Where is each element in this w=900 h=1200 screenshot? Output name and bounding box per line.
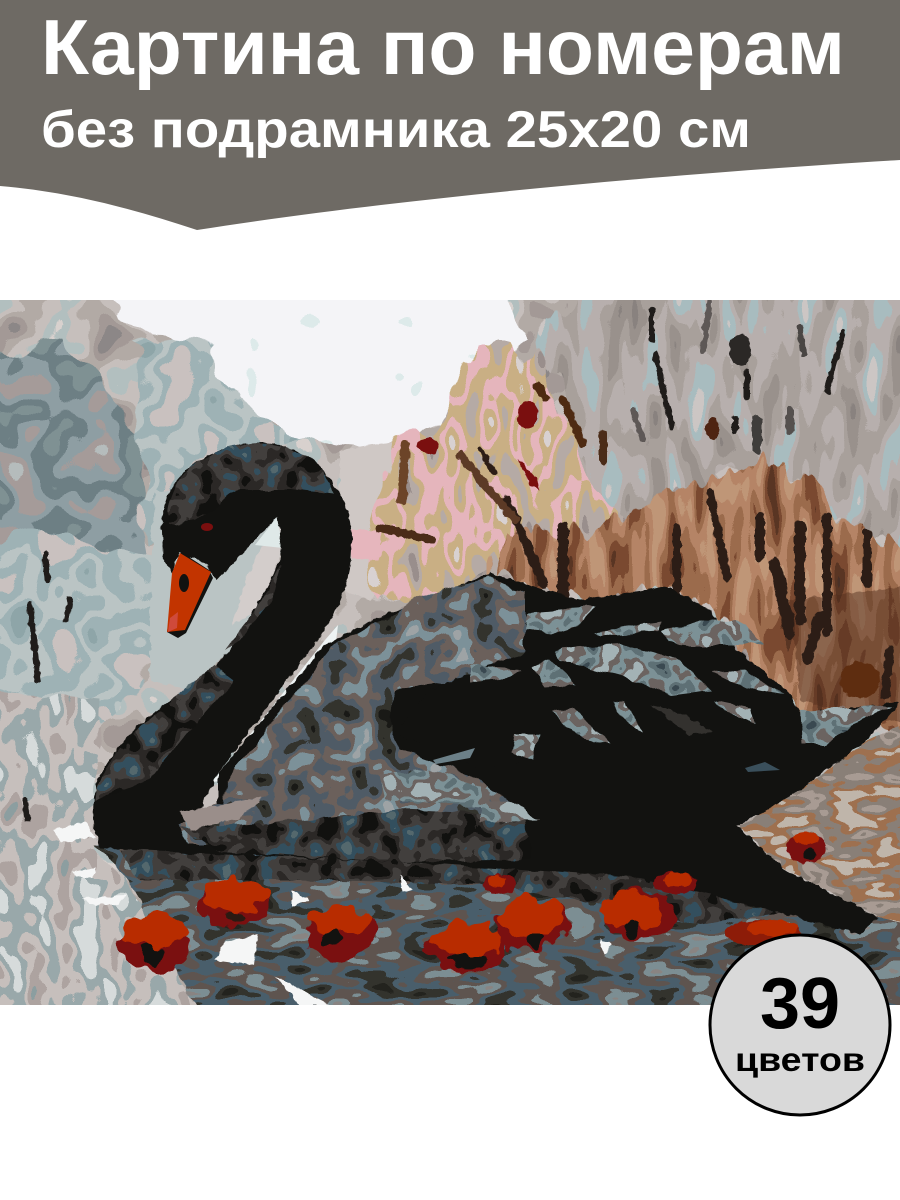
- badge: 39 colours: [710, 935, 890, 1115]
- badge label: цветов: [735, 1041, 865, 1078]
- painting: black swan: [0, 280, 900, 1025]
- reed base: [495, 462, 900, 730]
- header banner: [0, 0, 900, 230]
- poppy 8: [484, 874, 516, 894]
- wing black core: [392, 653, 525, 735]
- shore and stone: [0, 820, 200, 1015]
- subtitle: без подрамника 25х20 см: [41, 101, 751, 159]
- poppy 10: [786, 832, 826, 863]
- painting background: [0, 280, 900, 1025]
- swan body: [218, 573, 900, 935]
- swan neck and head: [93, 443, 352, 860]
- badge number: 39: [760, 964, 840, 1044]
- wing feathers: [380, 607, 895, 822]
- light gap behind head: [150, 490, 285, 690]
- water: [92, 845, 900, 1015]
- wing lower shadow: [180, 810, 530, 862]
- wing grey plumage: [178, 577, 525, 848]
- swan: [93, 443, 900, 935]
- swan eye: [201, 523, 213, 531]
- water shadow band: [120, 850, 780, 925]
- water highlights: [52, 822, 612, 1005]
- poppy 1: [117, 913, 193, 969]
- neck mottling: [96, 665, 235, 800]
- poppy 2: [199, 878, 271, 929]
- poppy 5: [496, 896, 568, 951]
- poppy 7: [653, 872, 697, 894]
- reed blobs: [417, 334, 751, 490]
- water highlights and poppies: [52, 822, 826, 1005]
- reeds: [380, 445, 890, 695]
- swan beak: [167, 552, 213, 638]
- poppy 4: [428, 922, 508, 972]
- poppy 6: [600, 889, 674, 941]
- poppy 9: [725, 920, 801, 946]
- head mottling: [168, 443, 336, 525]
- title: Картина по номерам: [41, 3, 845, 91]
- poppy 3: [305, 906, 373, 958]
